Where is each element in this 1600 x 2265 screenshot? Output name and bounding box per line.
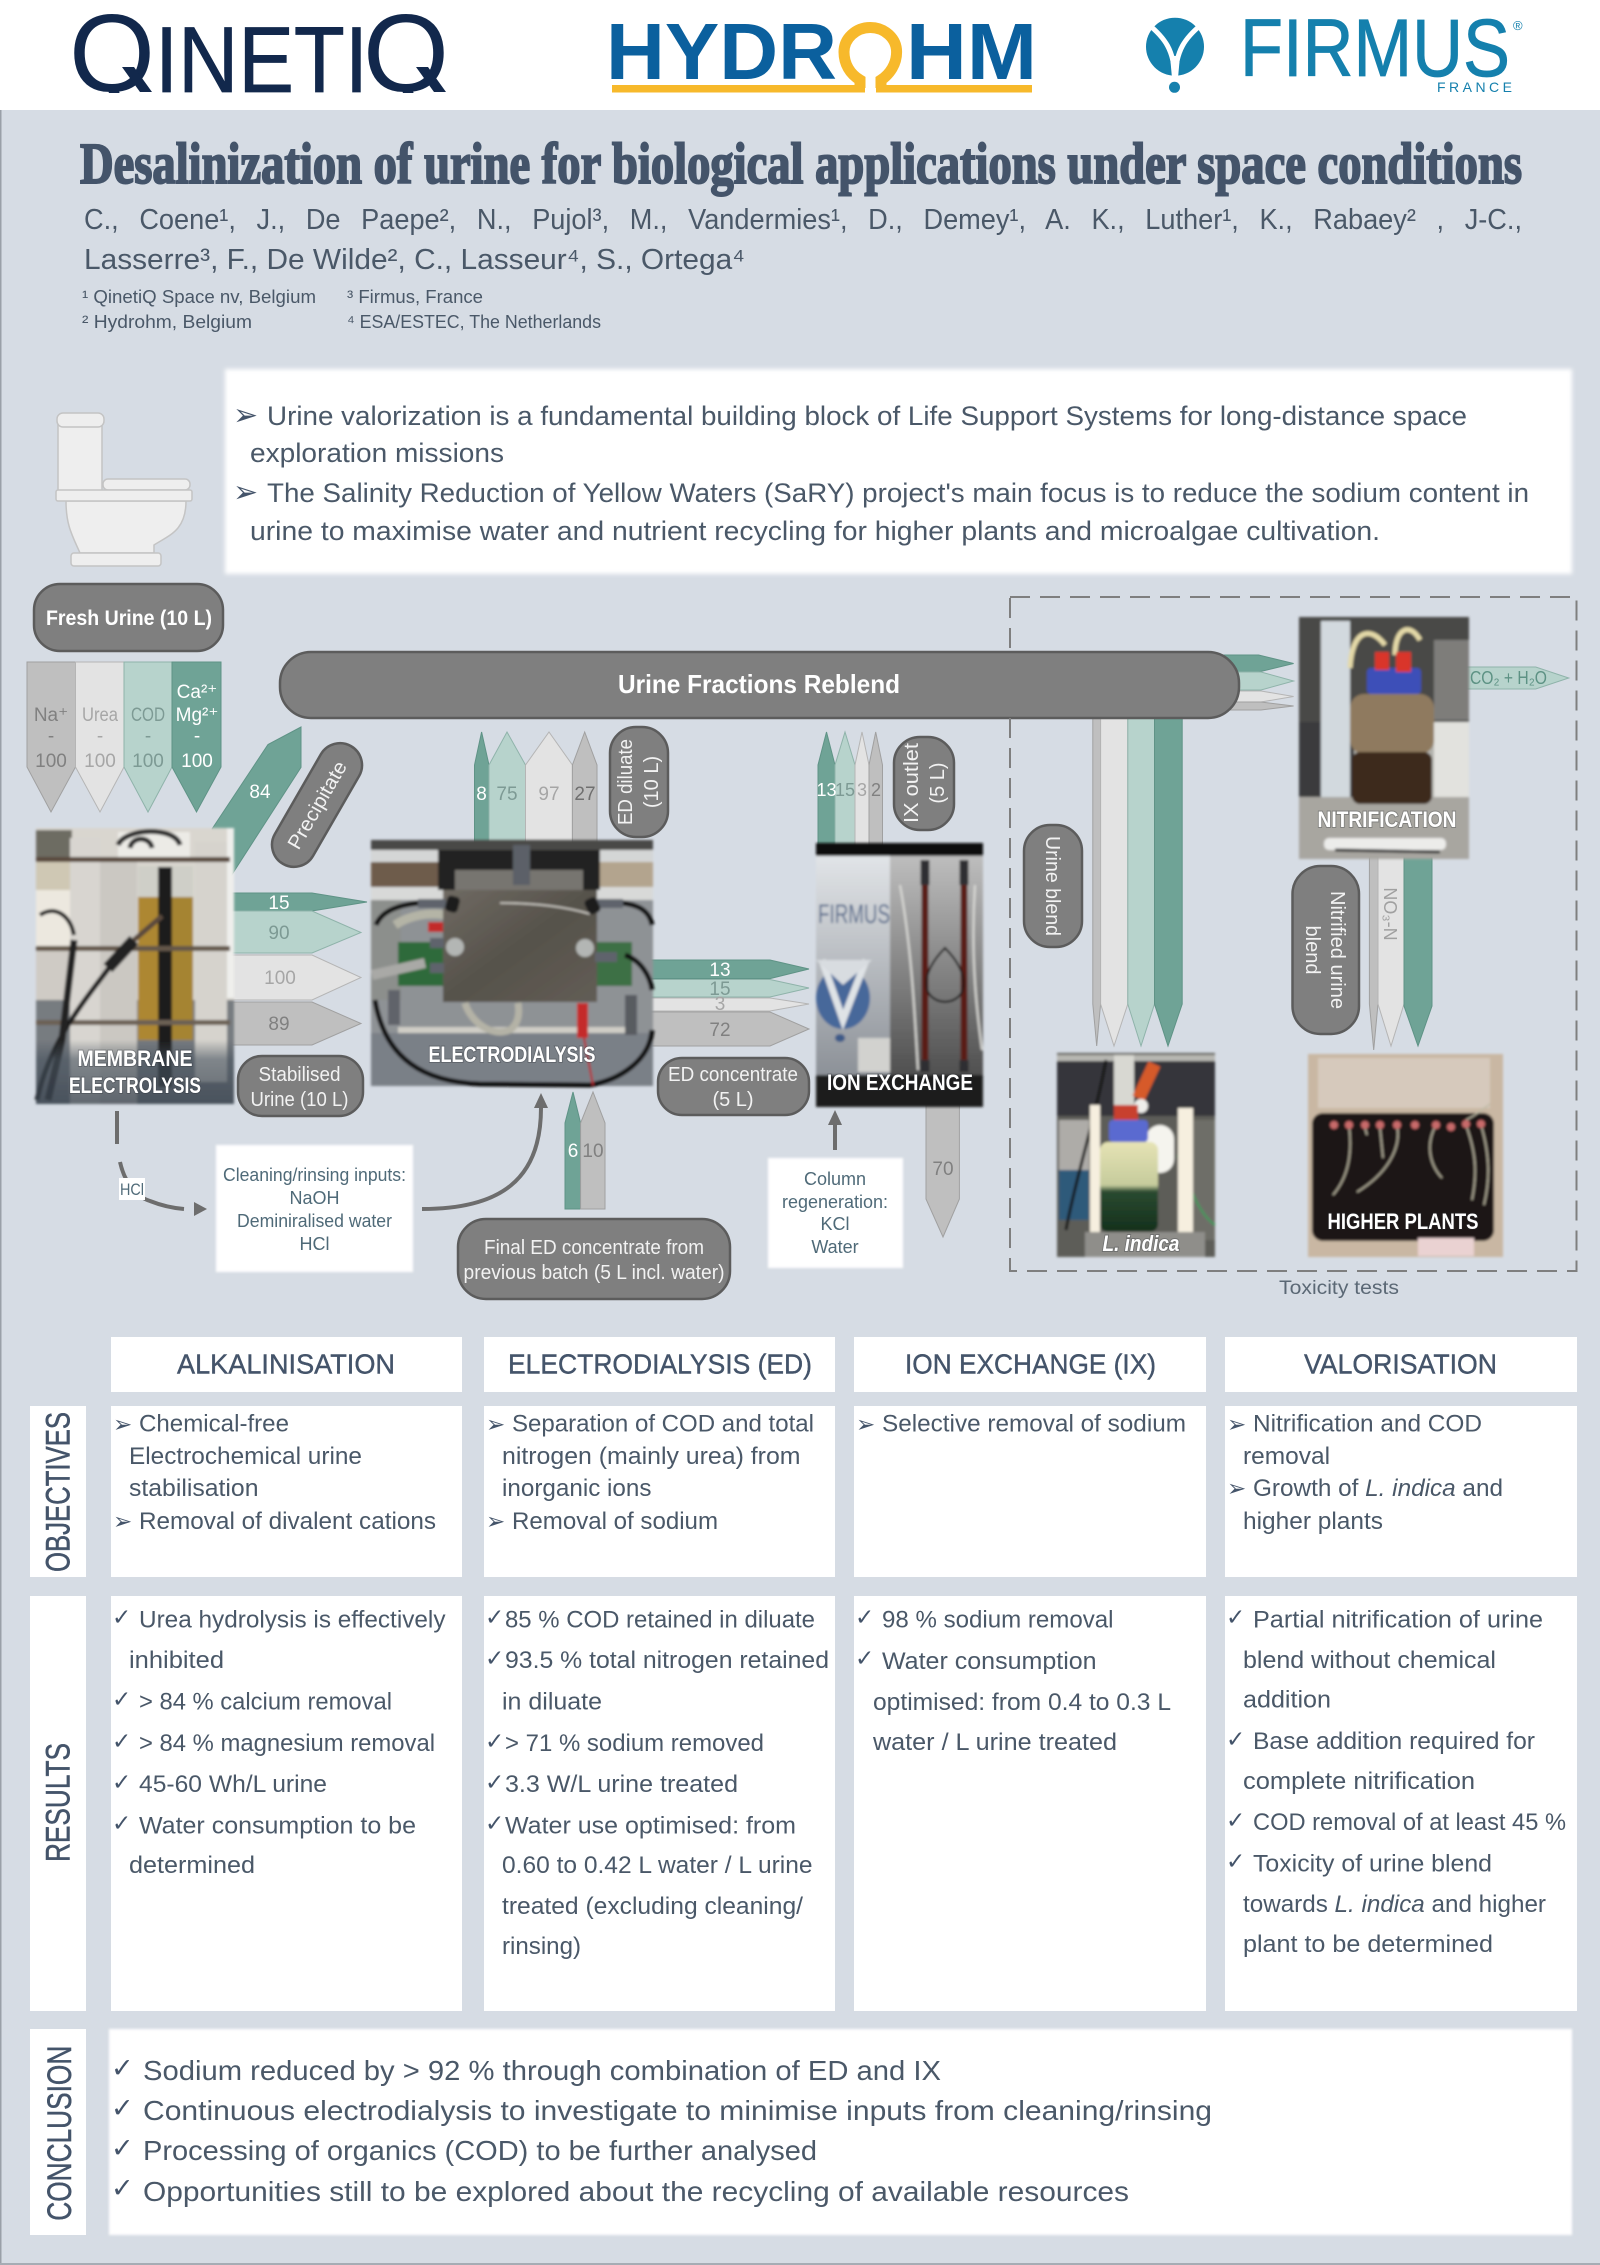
arrows: stabilised urine: 89 xyxy=(268,1014,290,1035)
arrows: fresh urine composition: COD xyxy=(131,705,165,726)
panel: results electrodialysis: ✓ xyxy=(485,1646,504,1672)
panel: results electrodialysis: ✓ xyxy=(485,1770,504,1796)
row label: objectives xyxy=(30,1406,86,1577)
arrows: fresh urine composition: Mg²⁺ xyxy=(176,705,218,726)
arrows: final ED concentrate input: 6 xyxy=(568,1141,578,1162)
panel: results electrodialysis: 93.5 % total nitrogen retained xyxy=(505,1647,829,1674)
panel: objectives alkalinisation: Removal of divalent cations xyxy=(139,1508,436,1535)
header band with logos xyxy=(0,0,1600,115)
row label: conclusion xyxy=(30,2029,86,2235)
panel: results valorisation: Toxicity of urine blend xyxy=(1253,1850,1492,1878)
arrows: ED concentrate: 15 xyxy=(709,979,731,1000)
arrow: IX waste 70 xyxy=(926,1100,959,1237)
logo: Hydrohm: HYDR xyxy=(606,7,837,96)
arrows: ED diluate: 8 xyxy=(476,784,487,805)
photo: L. indica: L. indica xyxy=(1102,1231,1180,1256)
pill: nitrified urine blend xyxy=(1292,866,1359,1034)
panel: results ion exchange: ✓ xyxy=(855,1646,874,1672)
panel: results valorisation: blend without chemical xyxy=(1243,1647,1496,1674)
panel: objectives alkalinisation: ➢ xyxy=(113,1509,132,1535)
arrow: IX waste 70: 70 xyxy=(932,1159,954,1180)
panel: results alkalinisation: ✓ xyxy=(112,1811,131,1837)
heading: ion exchange: ION EXCHANGE (IX) xyxy=(905,1348,1156,1380)
arrows: fresh urine composition: 100 xyxy=(84,751,116,772)
panel: results valorisation: ✓ xyxy=(1226,1605,1245,1631)
affiliations: ¹ QinetiQ Space nv, Belgium xyxy=(82,287,316,307)
panel: results electrodialysis: ✓ xyxy=(485,1811,504,1837)
authors xyxy=(84,204,1522,276)
panel: introduction: Urine valorization is a fundamental building block of Life Support Systems for long-distance space xyxy=(267,401,1467,431)
panel: objectives valorisation: Growth of L. indica and xyxy=(1253,1475,1503,1502)
pill: ED diluate xyxy=(610,727,668,837)
panel: objectives electrodialysis: Separation of COD and total xyxy=(512,1411,814,1438)
arrows: fresh urine composition: - xyxy=(145,726,151,747)
panel: introduction: exploration missions xyxy=(250,438,504,468)
panel: objectives valorisation: ➢ xyxy=(1227,1476,1246,1502)
arrows: fresh urine composition: Ca²⁺ xyxy=(177,682,217,703)
arrows: final ED concentrate input: 10 xyxy=(582,1141,604,1162)
panel: objectives alkalinisation: ➢ xyxy=(113,1412,132,1438)
arrows: fresh urine composition: 100 xyxy=(132,751,164,772)
panel: results electrodialysis: 0.60 to 0.42 L water / L urine xyxy=(502,1852,812,1879)
panel: results valorisation: Base addition required for xyxy=(1253,1728,1535,1755)
panel: introduction: ➢ xyxy=(233,398,258,433)
photo: higher plants xyxy=(1308,1054,1503,1257)
box: cleaning/rinsing inputs: Deminiralised water xyxy=(237,1211,392,1231)
pill: nitrified urine blend: blend xyxy=(1301,926,1323,974)
arrow: cleaning inputs to electrodialysis xyxy=(422,1093,548,1209)
logo: Firmus: ® xyxy=(1513,18,1523,33)
panel: results alkalinisation: ✓ xyxy=(112,1770,131,1796)
photo: electrodialysis: ELECTRODIALYSIS xyxy=(428,1042,596,1067)
panel: conclusion: Sodium reduced by > 92 % through combination of ED and IX xyxy=(143,2055,941,2086)
arrow: CO2 + H2O: CO₂ + H₂O xyxy=(1470,668,1547,688)
arrows: IX outlet: 3 xyxy=(857,780,867,800)
heading: electrodialysis xyxy=(484,1337,835,1392)
arrows: IX outlet: 15 xyxy=(835,780,855,800)
arrow: dashed HCl line to cleaning inputs xyxy=(117,1111,207,1216)
arrows: ED concentrate: 13 xyxy=(709,960,731,981)
panel: results alkalinisation: determined xyxy=(129,1852,255,1879)
panel: results valorisation: complete nitrification xyxy=(1243,1768,1475,1795)
arrows: stabilised urine: 90 xyxy=(268,923,290,944)
panel: introduction xyxy=(225,369,1572,574)
panel: objectives alkalinisation: Chemical-free xyxy=(139,1411,289,1438)
box: column regeneration: Water xyxy=(811,1237,859,1257)
panel: objectives electrodialysis: inorganic ions xyxy=(502,1475,652,1502)
panel: conclusion: ✓ xyxy=(111,2133,134,2164)
photo: L. indica xyxy=(1057,1053,1215,1257)
arrows: fresh urine composition: - xyxy=(48,726,54,747)
arrows: fresh urine composition: - xyxy=(194,726,200,747)
panel: objectives alkalinisation xyxy=(111,1406,462,1577)
panel: results ion exchange: optimised: from 0.4 to 0.3 L xyxy=(873,1689,1171,1716)
photo: nitrification: NITRIFICATION xyxy=(1318,807,1456,832)
panel: objectives alkalinisation: stabilisation xyxy=(129,1475,258,1502)
panel: conclusion: Processing of organics (COD) to be further analysed xyxy=(143,2135,817,2166)
row label: objectives: OBJECTIVES xyxy=(40,1412,78,1572)
panel: results electrodialysis: treated (excluding cleaning/ xyxy=(502,1893,803,1920)
panel: results alkalinisation: 45-60 Wh/L urine xyxy=(139,1771,327,1798)
pill: final ED concentrate: Final ED concentrate from xyxy=(484,1237,704,1259)
logo: Firmus: FRANCE xyxy=(1437,79,1512,95)
panel: results electrodialysis: ✓ xyxy=(485,1605,504,1631)
arrows: stabilised urine xyxy=(230,893,367,1045)
panel: objectives electrodialysis: Removal of sodium xyxy=(512,1508,718,1535)
photo: membrane electrolysis: MEMBRANE xyxy=(78,1046,192,1071)
logo: Hydrohm: HM xyxy=(906,7,1037,96)
dashed frame: toxicity tests xyxy=(1010,597,1576,1271)
heading: alkalinisation: ALKALINISATION xyxy=(177,1348,395,1380)
panel: results ion exchange: 98 % sodium removal xyxy=(882,1607,1114,1634)
photo: ion exchange xyxy=(816,843,983,1107)
pill: fresh urine: Fresh Urine (10 L) xyxy=(46,607,212,630)
arrow: precipitate 84: 84 xyxy=(249,782,271,803)
logo: QinetiQ xyxy=(74,14,446,93)
arrows: fresh urine composition: - xyxy=(97,726,103,747)
panel: results electrodialysis: in diluate xyxy=(502,1688,602,1716)
affiliations: ² Hydrohm, Belgium xyxy=(82,312,252,332)
panel: results valorisation: Partial nitrification of urine xyxy=(1253,1607,1543,1634)
pill: final ED concentrate xyxy=(458,1219,730,1299)
panel: results alkalinisation: Urea hydrolysis is effectively xyxy=(139,1607,446,1634)
pill: stabilised urine xyxy=(238,1056,363,1116)
panel: conclusion: Opportunities still to be explored about the recycling of available resources xyxy=(143,2176,1129,2207)
pill: ED concentrate: (5 L) xyxy=(712,1089,754,1111)
icon: toilet xyxy=(56,413,192,566)
pill: final ED concentrate: previous batch (5 L incl. water) xyxy=(464,1262,724,1284)
box: cleaning/rinsing inputs xyxy=(216,1145,413,1272)
logo: Hydrohm xyxy=(606,7,1037,96)
arrows: fresh urine composition: Urea xyxy=(82,705,118,726)
pill: urine fractions reblend: Urine Fractions Reblend xyxy=(618,669,900,699)
panel: conclusion xyxy=(109,2029,1572,2235)
panel: results ion exchange: water / L urine treated xyxy=(872,1729,1117,1756)
panel: objectives electrodialysis: ➢ xyxy=(486,1412,505,1438)
box: cleaning/rinsing inputs: NaOH xyxy=(289,1188,340,1208)
arrows: final ED concentrate input xyxy=(565,1092,605,1209)
panel: results valorisation: addition xyxy=(1243,1687,1331,1714)
box: column regeneration: KCl xyxy=(820,1214,850,1234)
affiliations: ³ Firmus, France xyxy=(347,287,483,307)
box: column regeneration: Column xyxy=(804,1169,866,1189)
arrows: ED concentrate: 3 xyxy=(715,994,725,1015)
panel: objectives valorisation: removal xyxy=(1243,1443,1330,1470)
pill: IX outlet: IX outlet xyxy=(901,743,923,823)
heading: valorisation xyxy=(1225,1337,1577,1392)
authors: C., Coene¹, J., De Paepe², N., Pujol³, M., Vandermies¹, D., Demey¹, A. K., Luther¹, K., Rabaey² , J-C., xyxy=(84,204,1522,236)
panel: results alkalinisation: > 84 % calcium removal xyxy=(139,1688,392,1716)
pill: urine blend: Urine blend xyxy=(1041,836,1063,936)
affiliations xyxy=(82,287,601,332)
panel: objectives ion exchange xyxy=(854,1406,1206,1577)
panel: results alkalinisation: inhibited xyxy=(129,1647,224,1674)
panel: results valorisation: ✓ xyxy=(1226,1727,1245,1753)
panel: conclusion: Continuous electrodialysis to investigate to minimise inputs from cleaning/rinsing xyxy=(143,2095,1212,2126)
label: toxicity tests: Toxicity tests xyxy=(1279,1278,1399,1299)
arrows: fresh urine composition: Na⁺ xyxy=(34,705,68,726)
panel: conclusion: ✓ xyxy=(111,2173,134,2204)
photo: nitrification xyxy=(1299,617,1469,859)
pill: nitrified urine blend: Nitrified urine xyxy=(1326,891,1348,1009)
pill: precipitate xyxy=(264,735,370,875)
panel: results alkalinisation: ✓ xyxy=(112,1729,131,1755)
arrow: precipitate 84 xyxy=(212,727,301,878)
panel: objectives valorisation xyxy=(1225,1406,1577,1577)
panel: introduction: urine to maximise water and nutrient recycling for higher plants and microalgae cultivation. xyxy=(250,516,1380,546)
photo: ion exchange: FIRMUS xyxy=(818,899,890,929)
box: cleaning/rinsing inputs: HCl xyxy=(300,1234,330,1254)
panel: introduction: ➢ xyxy=(233,475,258,510)
arrows: nitrified urine blend: NO₃-N xyxy=(1380,887,1400,941)
arrows: urine blend to L. indica xyxy=(1093,710,1182,1046)
pill: fresh urine xyxy=(34,584,223,651)
panel: conclusion: ✓ xyxy=(111,2093,134,2124)
pill: IX outlet: (5 L) xyxy=(927,762,949,804)
pill: urine fractions reblend xyxy=(280,652,1239,718)
panel: results valorisation: ✓ xyxy=(1226,1808,1245,1834)
photo: membrane electrolysis: ELECTROLYSIS xyxy=(69,1073,201,1098)
arrows: ED diluate: 97 xyxy=(538,784,560,805)
panel: results valorisation: ✓ xyxy=(1226,1849,1245,1875)
arrows: fresh urine composition: 100 xyxy=(181,751,213,772)
panel: conclusion: ✓ xyxy=(111,2053,134,2084)
arrows: nitrified urine blend xyxy=(1369,850,1432,1050)
panel: results valorisation: COD removal of at least 45 % xyxy=(1253,1809,1566,1836)
logo: Firmus xyxy=(1146,3,1523,95)
heading: alkalinisation xyxy=(111,1337,462,1392)
logo: QinetiQ: INETI xyxy=(155,7,368,112)
panel: results ion exchange: ✓ xyxy=(855,1605,874,1631)
panel: results electrodialysis: rinsing) xyxy=(502,1933,581,1960)
arrows: stabilised urine: 100 xyxy=(264,968,296,989)
panel: results electrodialysis: ✓ xyxy=(485,1729,504,1755)
box: column regeneration xyxy=(768,1158,903,1268)
panel: objectives electrodialysis xyxy=(484,1406,835,1577)
arrows: fresh urine composition xyxy=(27,662,221,812)
pill: ED concentrate xyxy=(658,1058,809,1115)
arrows: fresh urine composition: 100 xyxy=(35,751,67,772)
panel: objectives alkalinisation: Electrochemical urine xyxy=(129,1443,362,1470)
pill: urine blend xyxy=(1024,825,1082,947)
row label: results xyxy=(30,1596,86,2011)
photo: higher plants: HIGHER PLANTS xyxy=(1328,1209,1478,1234)
authors: Lasserre³, F., De Wilde², C., Lasseur⁴, S., Ortega⁴ xyxy=(84,244,745,276)
panel: objectives ion exchange: Selective removal of sodium xyxy=(882,1411,1186,1438)
arrows: ED concentrate xyxy=(650,960,809,1046)
box: column regeneration: regeneration: xyxy=(782,1192,888,1212)
panel: results electrodialysis xyxy=(484,1596,835,2011)
panel: results valorisation xyxy=(1225,1596,1577,2011)
panel: results electrodialysis: Water use optimised: from xyxy=(505,1812,796,1839)
panel: results valorisation: plant to be determined xyxy=(1243,1931,1493,1958)
arrows: IX outlet: 2 xyxy=(871,780,881,800)
panel: results valorisation: towards L. indica and higher xyxy=(1243,1891,1546,1918)
arrows: IX outlet xyxy=(816,732,882,848)
panel: objectives ion exchange: ➢ xyxy=(856,1412,875,1438)
heading: ion exchange xyxy=(854,1337,1206,1392)
photo: membrane electrolysis xyxy=(36,828,234,1104)
panel: introduction: The Salinity Reduction of Yellow Waters (SaRY) project's main focus is to reduce the sodium content in xyxy=(267,478,1529,508)
panel: results alkalinisation: Water consumption to be xyxy=(139,1812,416,1839)
panel: objectives valorisation: ➢ xyxy=(1227,1412,1246,1438)
arrows: IX outlet: 13 xyxy=(816,780,837,800)
photo: ion exchange: ION EXCHANGE xyxy=(827,1070,973,1095)
panel: objectives electrodialysis: nitrogen (mainly urea) from xyxy=(502,1443,800,1470)
pill: precipitate: Precipitate xyxy=(284,758,352,853)
table column headers xyxy=(111,1337,1577,1392)
panel: results alkalinisation: > 84 % magnesium removal xyxy=(139,1730,435,1757)
panel: objectives valorisation: higher plants xyxy=(1243,1508,1383,1535)
panel: results ion exchange xyxy=(854,1596,1206,2011)
pill: ED diluate: ED diluate xyxy=(615,739,637,825)
logo: Firmus: FIRMUS xyxy=(1240,3,1510,94)
heading: valorisation: VALORISATION xyxy=(1304,1348,1497,1380)
panel: results electrodialysis: 85 % COD retained in diluate xyxy=(505,1607,815,1634)
row label: conclusion: CONCLUSION xyxy=(41,2046,79,2221)
panel: objectives electrodialysis: ➢ xyxy=(486,1509,505,1535)
panel: results alkalinisation xyxy=(111,1596,462,2011)
pill: ED diluate: (10 L) xyxy=(641,756,663,808)
pill: stabilised urine: Urine (10 L) xyxy=(250,1089,348,1111)
box: cleaning/rinsing inputs: Cleaning/rinsing inputs: xyxy=(223,1165,406,1185)
heading: electrodialysis: ELECTRODIALYSIS (ED) xyxy=(508,1348,812,1380)
arrows: ED concentrate: 72 xyxy=(709,1020,731,1041)
photo: electrodialysis xyxy=(371,840,653,1086)
pill: ED concentrate: ED concentrate xyxy=(668,1064,798,1086)
panel: results alkalinisation: ✓ xyxy=(112,1687,131,1713)
panel: results electrodialysis: 3.3 W/L urine treated xyxy=(505,1771,738,1798)
arrows: ED diluate: 27 xyxy=(574,784,596,805)
arrows: ED diluate: 75 xyxy=(496,784,518,805)
arrow: to nitrification xyxy=(1224,655,1294,710)
arrow: column regeneration to ion exchange xyxy=(828,1110,842,1150)
panel: results electrodialysis: > 71 % sodium removed xyxy=(505,1730,764,1757)
arrows: ED diluate xyxy=(474,732,597,845)
panel: objectives valorisation: Nitrification and COD xyxy=(1253,1411,1482,1438)
panel: results ion exchange: Water consumption xyxy=(882,1648,1097,1675)
row label: results: RESULTS xyxy=(40,1743,78,1862)
affiliations: ⁴ ESA/ESTEC, The Netherlands xyxy=(347,312,601,332)
pill: stabilised urine: Stabilised xyxy=(258,1064,340,1086)
pill: IX outlet xyxy=(894,737,954,830)
arrows: stabilised urine: 15 xyxy=(268,893,290,914)
panel: results alkalinisation: ✓ xyxy=(112,1605,131,1631)
label: HCl: HCl xyxy=(120,1180,144,1199)
